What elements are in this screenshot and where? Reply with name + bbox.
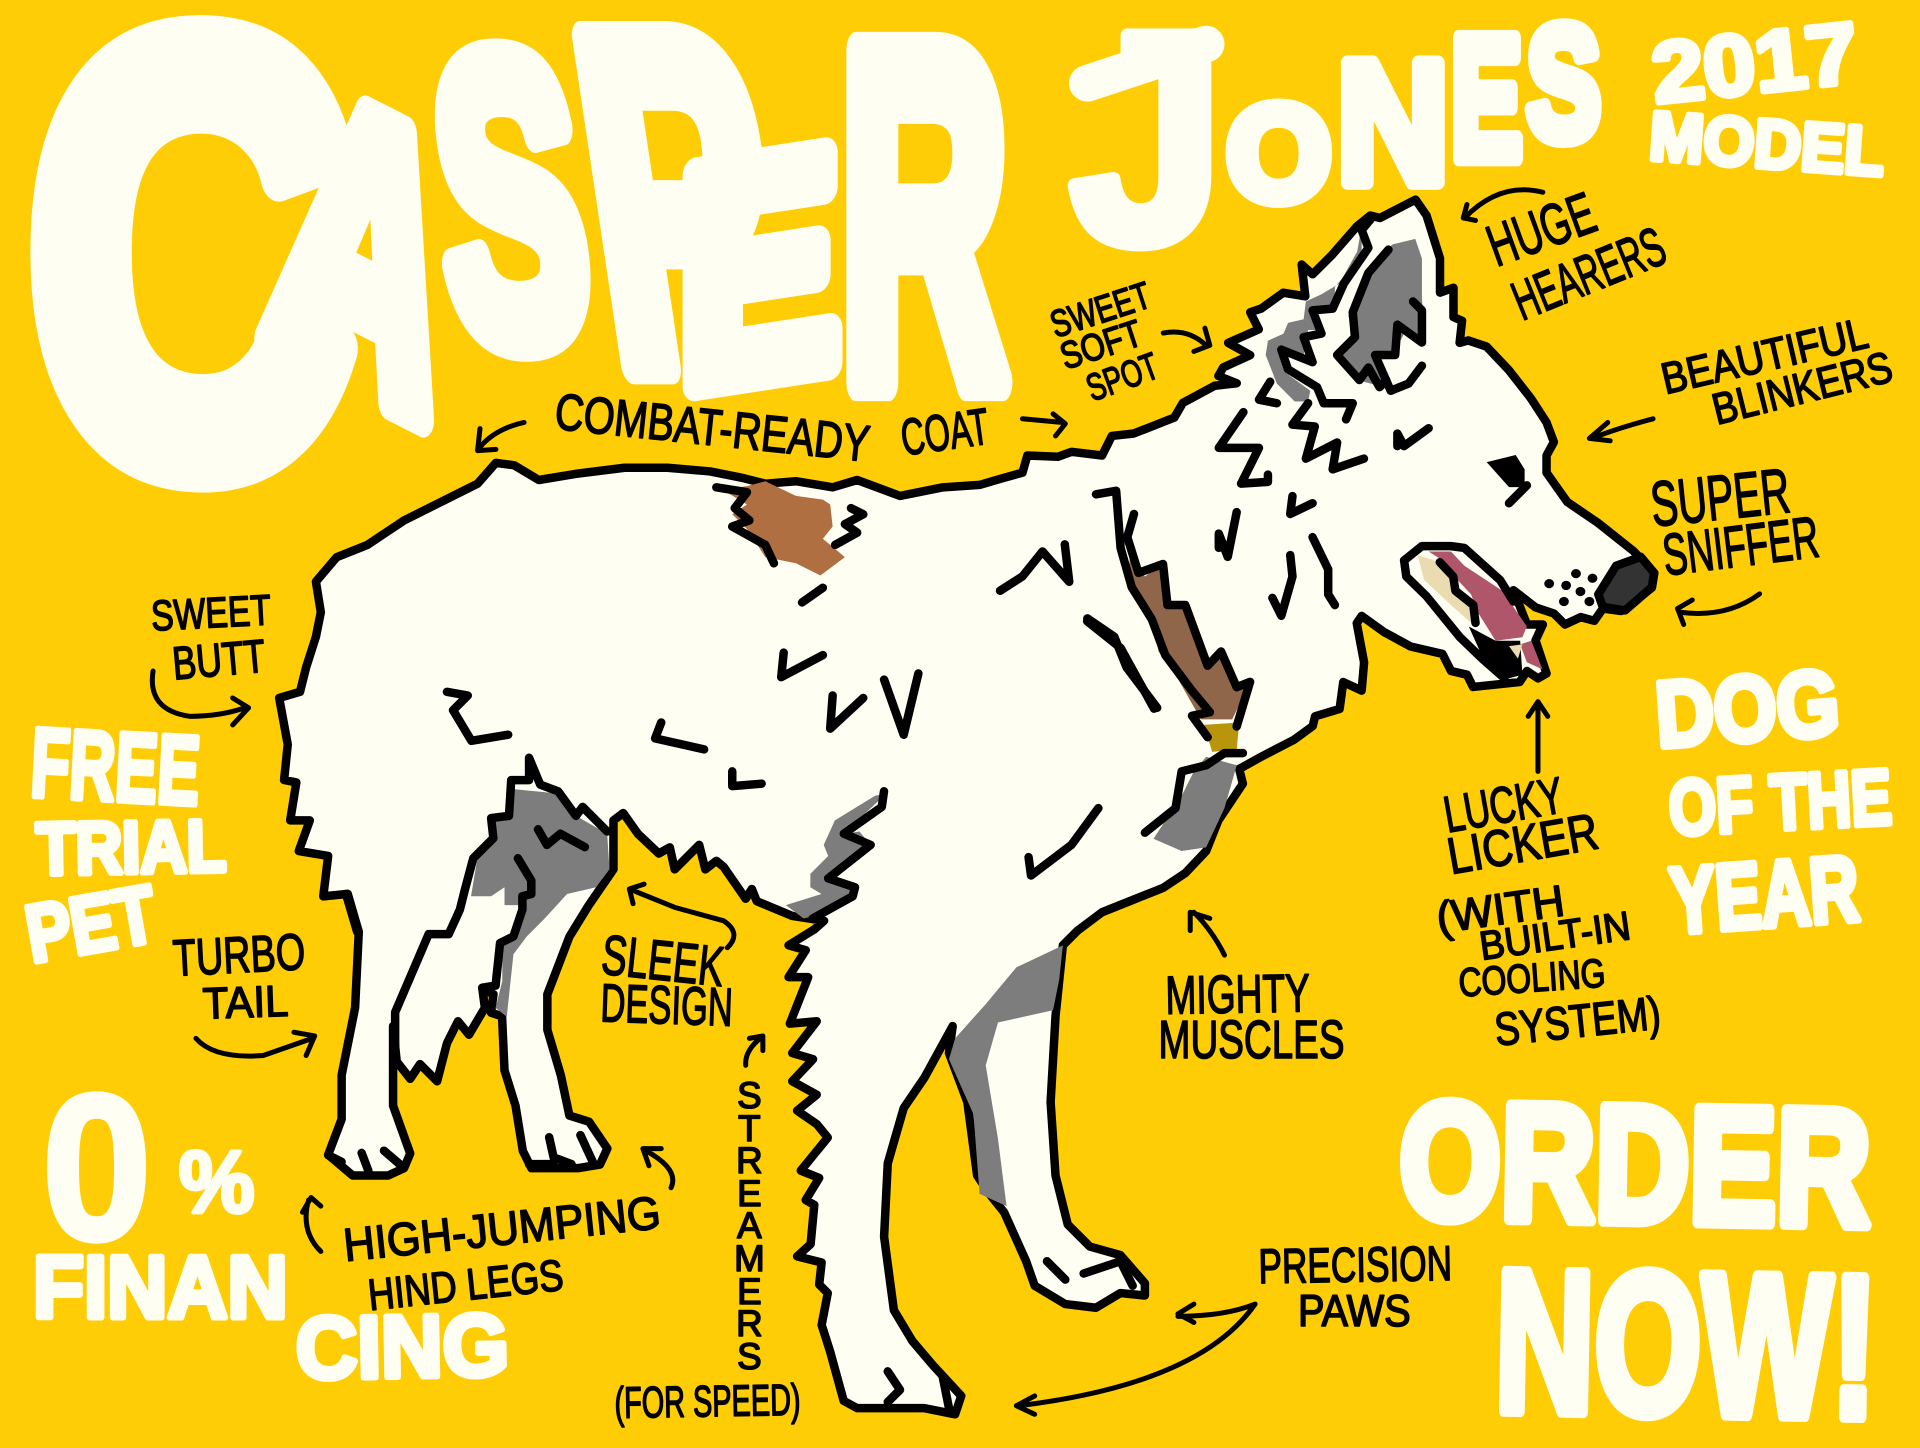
callout: dog of the year: DOG xyxy=(1652,650,1843,767)
grey patch: hip xyxy=(471,789,886,1017)
label: streamers for speed: STREAMERS xyxy=(734,1075,765,1377)
label: high-jumping hind legs: HIND LEGS xyxy=(366,1251,566,1320)
title: Casper: A xyxy=(247,0,484,502)
callout: 0% financing xyxy=(33,1052,510,1398)
title: Jones xyxy=(1070,0,1600,305)
heading: 2017 model: 2017 xyxy=(1647,5,1862,122)
callout: free trial pet: PET xyxy=(19,869,163,980)
grey patch: neck xyxy=(1153,757,1237,851)
title: Jones: N xyxy=(1337,25,1449,219)
label: sweet soft spot: SWEET xyxy=(1045,275,1156,347)
body fur lines xyxy=(447,487,1243,876)
label: beautiful blinkers xyxy=(1589,309,1897,441)
label: lucky licker with built-in cooling system: COOLING xyxy=(1457,950,1607,1006)
label: turbo tail: TAIL xyxy=(202,977,289,1029)
brown patch on back xyxy=(722,481,845,576)
title: Casper: E xyxy=(680,86,839,452)
dog body fill and outline xyxy=(279,200,1654,1414)
heading: 2017 model: MODEL xyxy=(1647,97,1887,191)
label: mighty muscles: MUSCLES xyxy=(1158,1010,1345,1070)
label: sweet soft spot: SPOT xyxy=(1081,345,1164,410)
label: lucky licker with built-in cooling system: (WITH xyxy=(1433,877,1568,943)
label: combat-ready coat: COMBAT-READY xyxy=(552,382,873,473)
label: lucky licker with built-in cooling system xyxy=(1433,702,1663,1056)
callout: free trial pet: TRIAL xyxy=(36,804,227,890)
label: huge hearers: HEARERS xyxy=(1503,215,1674,332)
label: sweet butt xyxy=(150,586,272,725)
title: Casper xyxy=(31,0,1008,590)
label: huge hearers: HUGE xyxy=(1479,180,1604,279)
paw toes xyxy=(888,1261,1133,1408)
title: Jones: O xyxy=(1227,79,1331,229)
heading: 2017 model xyxy=(1647,5,1887,191)
label: combat-ready coat xyxy=(478,382,1065,473)
callout: 0% financing: % xyxy=(179,1132,255,1231)
label: beautiful blinkers: BEAUTIFUL xyxy=(1657,309,1873,404)
callout: 0% financing: FINAN xyxy=(33,1238,288,1337)
callout: dog of the year xyxy=(1652,650,1894,953)
label: lucky licker with built-in cooling system: BUILT-IN xyxy=(1476,902,1633,969)
callout: 0% financing: CING xyxy=(295,1295,510,1398)
label: mighty muscles: MIGHTY xyxy=(1165,963,1310,1026)
callout: free trial pet: FREE xyxy=(28,707,203,826)
label: combat-ready coat: COAT xyxy=(897,397,993,466)
label: precision paws xyxy=(1016,1237,1452,1414)
label: turbo tail: TURBO xyxy=(171,922,307,987)
label: sleek design: SLEEK xyxy=(599,923,727,998)
label: precision paws: PRECISION xyxy=(1258,1237,1452,1294)
dog illustration xyxy=(279,200,1654,1414)
callout: free trial pet xyxy=(19,707,227,980)
label: lucky licker with built-in cooling system: LICKER xyxy=(1443,802,1602,885)
hind leg inner lines xyxy=(328,758,884,1171)
label: high-jumping hind legs xyxy=(302,1149,673,1320)
label: sleek design: DESIGN xyxy=(600,973,734,1038)
gold collar buckle xyxy=(1204,722,1239,752)
label: huge hearers xyxy=(1463,180,1674,332)
label: super sniffer: SNIFFER xyxy=(1659,505,1822,588)
callout: order now xyxy=(1398,1068,1879,1448)
label: streamers for speed: (FOR SPEED) xyxy=(614,1376,801,1428)
title: Jones: E xyxy=(1451,0,1522,195)
label: lucky licker with built-in cooling system: LUCKY xyxy=(1439,766,1567,843)
label: sweet butt: BUTT xyxy=(170,630,267,690)
label: sweet soft spot: SOFT xyxy=(1055,313,1147,378)
label: super sniffer xyxy=(1647,455,1822,624)
label: precision paws: PAWS xyxy=(1298,1287,1411,1336)
label: turbo tail xyxy=(171,922,315,1056)
callout: 0% financing: 0 xyxy=(42,1052,152,1284)
label: sweet butt: SWEET xyxy=(150,586,272,641)
label: streamers for speed xyxy=(614,1036,801,1428)
label: sleek design xyxy=(599,884,734,1038)
label: mighty muscles xyxy=(1158,912,1345,1070)
label: super sniffer: SUPER xyxy=(1647,455,1793,540)
label: sweet soft spot xyxy=(1045,275,1210,410)
label: high-jumping hind legs: HIGH-JUMPING xyxy=(341,1186,663,1271)
grey patch: front leg xyxy=(949,945,1063,1206)
head colour details xyxy=(1130,226,1542,719)
head outlines: ears, eye, nose, mouth xyxy=(1000,219,1654,737)
label: lucky licker with built-in cooling system: SYSTEM) xyxy=(1492,987,1663,1056)
